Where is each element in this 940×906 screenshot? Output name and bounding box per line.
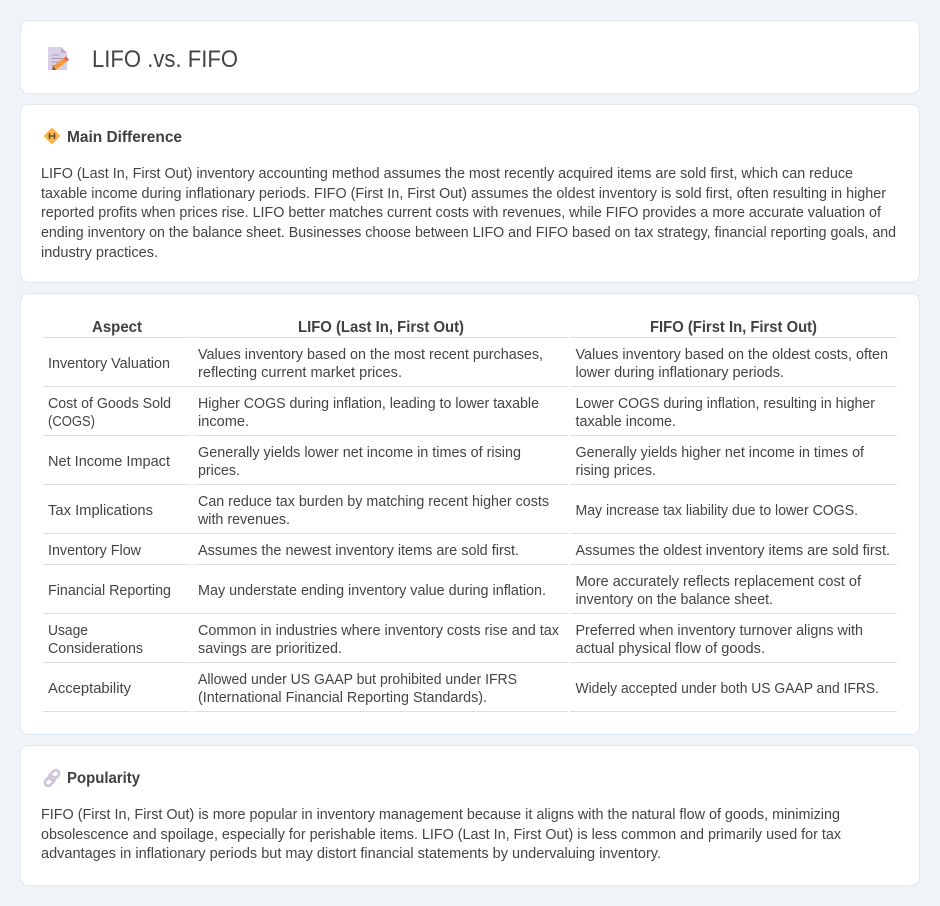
text block: main difference paragraph xyxy=(41,166,896,261)
heading: main difference: Main Difference xyxy=(67,129,182,146)
row: cost of goods sold: Higher COGS during inflation, leading to lower taxable xyxy=(198,396,539,412)
text block: popularity paragraph xyxy=(41,807,842,862)
row: tax implications: Can reduce tax burden by matching recent higher costs xyxy=(198,494,549,510)
text block: main difference paragraph: taxable income during inflationary periods. FIFO (First In, First Out) assumes the oldest inventory is sold first, often resulting in higher xyxy=(41,186,886,202)
row: financial reporting: May understate ending inventory value during inflation. xyxy=(198,583,546,599)
row: usage considerations: Usage xyxy=(48,623,88,639)
row: usage considerations: Preferred when inventory turnover aligns with xyxy=(576,623,863,639)
row: inventory valuation: Values inventory based on the oldest costs, often xyxy=(576,347,888,363)
table header: FIFO (First In, First Out) xyxy=(650,319,817,336)
row: usage considerations: Common in industries where inventory costs rise and tax xyxy=(198,623,560,639)
row: cost of goods sold xyxy=(43,396,897,436)
row: cost of goods sold: (COGS) xyxy=(48,414,95,430)
table header: Aspect xyxy=(92,319,143,336)
table header: LIFO (Last In, First Out) xyxy=(298,319,464,336)
title: LIFO .vs. FIFO xyxy=(92,46,238,73)
heading: popularity: Popularity xyxy=(67,770,140,787)
row: usage considerations: savings are prioritized. xyxy=(198,641,342,657)
row: acceptability: Allowed under US GAAP but prohibited under IFRS xyxy=(198,672,517,688)
row: acceptability: (International Financial Reporting Standards). xyxy=(198,690,487,706)
row: acceptability: Acceptability xyxy=(48,681,132,697)
row: financial reporting: More accurately reflects replacement cost of xyxy=(576,574,862,590)
row: cost of goods sold: Lower COGS during inflation, resulting in higher xyxy=(576,396,875,412)
text block: popularity paragraph: obsolescence and spoilage, especially for perishable items. LIFO (Last In, First Out) is less common and primarily used for tax xyxy=(41,827,842,843)
row: net income impact: Generally yields lower net income in times of rising xyxy=(198,445,521,461)
icon: chain link xyxy=(44,769,60,787)
text block: main difference paragraph: ending inventory on the balance sheet. Businesses choose between LIFO and FIFO based on tax strategy, financial reporting goals, and xyxy=(41,225,896,241)
row: tax implications xyxy=(43,494,897,534)
row: usage considerations: Considerations xyxy=(48,641,143,657)
row: usage considerations xyxy=(43,623,897,663)
row: inventory flow: Inventory Flow xyxy=(48,543,142,559)
panel: main difference xyxy=(20,104,920,282)
row: cost of goods sold: taxable income. xyxy=(576,414,676,430)
text block: main difference paragraph: LIFO (Last In, First Out) inventory accounting method assumes the most recently acquired items are sold first, which can reduce xyxy=(41,166,853,182)
text block: popularity paragraph: FIFO (First In, First Out) is more popular in inventory management because it aligns with the natural flow of goods, minimizing xyxy=(41,807,840,823)
row: usage considerations: actual physical flow of goods. xyxy=(576,641,765,657)
row: cost of goods sold: Cost of Goods Sold xyxy=(48,396,171,412)
panel: popularity xyxy=(20,746,920,886)
row: inventory flow: Assumes the newest inventory items are sold first. xyxy=(198,543,519,559)
text block: popularity paragraph: advantages in inflationary periods but may distort financial statements by undervaluing inventory. xyxy=(41,846,661,862)
row: acceptability: Widely accepted under both US GAAP and IFRS. xyxy=(576,681,879,697)
text block: main difference paragraph: reported profits when prices rise. LIFO better matches current costs with revenues, while FIFO provides a more accurate valuation of xyxy=(41,205,882,221)
row: acceptability xyxy=(43,672,897,712)
row: net income impact: prices. xyxy=(198,463,240,479)
row: net income impact xyxy=(43,445,897,485)
icon: orange diamond xyxy=(44,128,60,144)
row: inventory flow xyxy=(43,543,897,565)
row: cost of goods sold: income. xyxy=(198,414,249,430)
row: inventory valuation: lower during inflationary periods. xyxy=(576,365,784,381)
row: inventory valuation xyxy=(43,347,897,387)
row: net income impact: Net Income Impact xyxy=(48,454,170,470)
row: net income impact: rising prices. xyxy=(576,463,656,479)
row: tax implications: with revenues. xyxy=(197,512,290,528)
row: financial reporting: Financial Reporting xyxy=(48,583,171,599)
row: financial reporting: inventory on the balance sheet. xyxy=(576,592,773,608)
panel: title header xyxy=(20,20,920,94)
row: inventory valuation: Values inventory based on the most recent purchases, xyxy=(198,347,543,363)
row: net income impact: Generally yields higher net income in times of xyxy=(576,445,865,461)
icon: memo with pencil xyxy=(48,47,69,70)
table header xyxy=(43,319,897,338)
row: tax implications: May increase tax liability due to lower COGS. xyxy=(576,503,858,519)
text block: main difference paragraph: industry practices. xyxy=(41,245,158,261)
row: inventory valuation: Inventory Valuation xyxy=(48,356,170,372)
row: inventory flow: Assumes the oldest inventory items are sold first. xyxy=(576,543,890,559)
row: tax implications: Tax Implications xyxy=(48,503,153,519)
panel: comparison table xyxy=(20,294,920,734)
row: inventory valuation: reflecting current market prices. xyxy=(198,365,402,381)
row: financial reporting xyxy=(43,574,897,614)
